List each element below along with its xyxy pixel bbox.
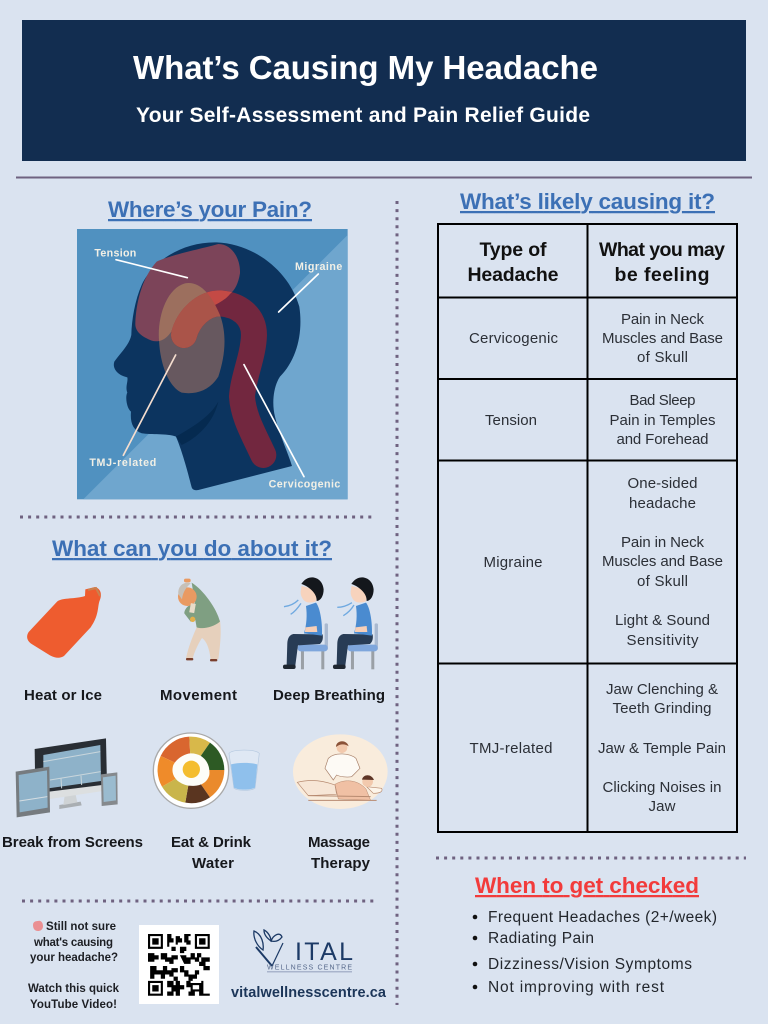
pain labels: TMJ-related bbox=[89, 457, 156, 469]
label: eat and drink water: Water bbox=[192, 855, 234, 872]
row: cervicogenic: of Skull bbox=[637, 349, 688, 366]
row: tension: and Forehead bbox=[616, 431, 708, 448]
row: tension: Pain in Temples bbox=[610, 412, 716, 429]
pain labels bbox=[89, 248, 342, 490]
logo: vital wellness centre: WELLNESS CENTRE bbox=[267, 964, 352, 972]
icon: deep breathing people bbox=[283, 577, 378, 669]
row: tmj-related bbox=[470, 681, 726, 815]
website url: vitalwellnesscentre.ca bbox=[231, 985, 387, 1001]
row: cervicogenic bbox=[469, 311, 723, 366]
heading: what's likely causing it: What’s likely causing it? bbox=[460, 189, 715, 214]
row: tmj-related: Jaw & Temple Pain bbox=[598, 740, 726, 757]
row: tension: Tension bbox=[485, 412, 537, 429]
table header: Headache bbox=[468, 264, 559, 286]
head silhouette bbox=[114, 242, 300, 490]
row: migraine: Light & Sound bbox=[615, 612, 710, 629]
row: migraine: Muscles and Base bbox=[602, 553, 723, 570]
row: migraine: One-sided bbox=[628, 475, 698, 492]
row: tmj-related: Jaw Clenching & bbox=[606, 681, 718, 698]
table header: be feeling bbox=[614, 264, 710, 286]
row: cervicogenic: Cervicogenic bbox=[469, 330, 558, 347]
label: massage therapy: Massage bbox=[308, 834, 370, 851]
icon: massage therapy bbox=[293, 734, 388, 809]
icon: food and water bbox=[153, 733, 259, 808]
video prompt text: Watch this quick bbox=[28, 983, 120, 995]
table header: Type of bbox=[480, 239, 547, 261]
label: deep breathing: Deep Breathing bbox=[273, 687, 385, 704]
pain labels: Migraine bbox=[295, 261, 342, 273]
row: migraine: Migraine bbox=[484, 554, 542, 571]
warning signs list bbox=[473, 909, 717, 996]
row: tension bbox=[485, 392, 716, 448]
pain labels: Cervicogenic bbox=[269, 478, 340, 490]
table grid bbox=[438, 224, 737, 832]
heading: where's your pain: Where’s your Pain? bbox=[108, 197, 312, 222]
label: eat and drink water bbox=[171, 834, 252, 872]
label: movement: Movement bbox=[160, 687, 237, 704]
label: massage therapy: Therapy bbox=[311, 855, 371, 872]
region: migraine and cervicogenic bbox=[184, 303, 263, 455]
warning signs list: Dizziness/Vision Symptoms bbox=[488, 956, 692, 973]
label: eat and drink water: Eat & Drink bbox=[171, 834, 252, 851]
subtitle: Your Self-Assessment and Pain Relief Guide bbox=[136, 104, 590, 127]
qr code bbox=[139, 925, 219, 1004]
icon: brain bbox=[33, 921, 43, 931]
heading: when to get checked: When to get checked bbox=[475, 873, 699, 898]
icon: screens bbox=[16, 738, 118, 817]
leader lines bbox=[116, 260, 318, 477]
pain labels: Tension bbox=[94, 248, 136, 260]
row: migraine: Pain in Neck bbox=[621, 534, 704, 551]
region: tmj bbox=[159, 283, 225, 393]
logo: vital wellness centre: ITAL bbox=[295, 938, 353, 966]
row: tmj-related: Jaw bbox=[648, 798, 676, 815]
label: break from screens: Break from Screens bbox=[2, 834, 143, 851]
row: tension: Bad Sleep bbox=[630, 392, 696, 409]
row: migraine: headache bbox=[629, 495, 696, 512]
headache table bbox=[438, 224, 737, 832]
row: migraine bbox=[484, 475, 723, 649]
video prompt text: what's causing bbox=[33, 937, 113, 949]
icon: hot water bottle bbox=[27, 587, 101, 658]
heading: what can you do: What can you do about it? bbox=[52, 536, 332, 561]
icon: leaf v mark bbox=[254, 930, 283, 966]
label: heat or ice: Heat or Ice bbox=[24, 687, 102, 704]
row: migraine: of Skull bbox=[637, 573, 688, 590]
video prompt text: your headache? bbox=[30, 952, 118, 964]
row: cervicogenic: Pain in Neck bbox=[621, 311, 704, 328]
warning signs list: Frequent Headaches (2+/week) bbox=[488, 909, 717, 926]
warning signs list: Not improving with rest bbox=[488, 979, 665, 996]
table header: What you may bbox=[599, 239, 725, 261]
head pain diagram bbox=[77, 229, 348, 499]
row: tmj-related: Teeth Grinding bbox=[612, 700, 712, 717]
row: cervicogenic: Muscles and Base bbox=[602, 330, 723, 347]
row: tmj-related: Clicking Noises in bbox=[602, 779, 722, 796]
icon: stretching person bbox=[178, 579, 221, 661]
warning signs list: Radiating Pain bbox=[488, 930, 594, 947]
label: massage therapy bbox=[308, 834, 371, 872]
logo: vital wellness centre bbox=[254, 930, 353, 972]
table header bbox=[468, 239, 725, 286]
row: migraine: Sensitivity bbox=[626, 632, 699, 649]
video prompt text: YouTube Video! bbox=[30, 999, 117, 1011]
video prompt text bbox=[28, 921, 120, 1011]
title: What’s Causing My Headache bbox=[133, 49, 598, 86]
region: tension bbox=[135, 244, 240, 341]
video prompt text: Still not sure bbox=[46, 921, 116, 933]
row: tmj-related: TMJ-related bbox=[470, 740, 552, 757]
header banner bbox=[22, 20, 746, 161]
